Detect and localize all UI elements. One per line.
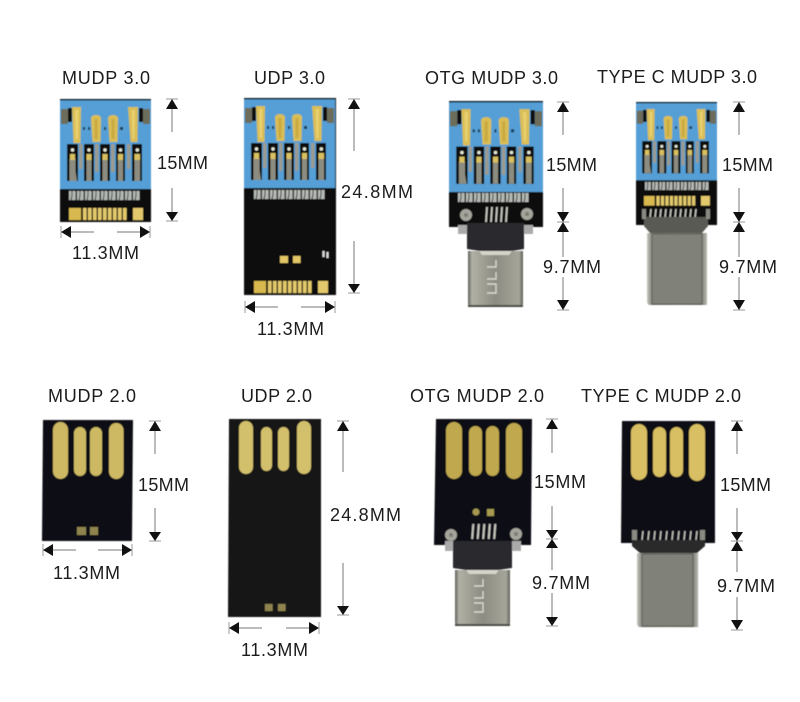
label: 9.7MM: 9.7MM xyxy=(543,257,601,277)
label: 11.3MM: 11.3MM xyxy=(72,243,139,263)
board: TYPE C MUDP 3.0 xyxy=(636,102,717,305)
title: TYPE C MUDP 3.0: TYPE C MUDP 3.0 xyxy=(597,67,757,87)
label: 15MM: 15MM xyxy=(534,472,586,492)
board: OTG MUDP 3.0 xyxy=(449,101,543,307)
label: 11.3MM: 11.3MM xyxy=(53,563,120,583)
title: OTG MUDP 3.0: OTG MUDP 3.0 xyxy=(425,68,558,88)
label: 11.3MM: 11.3MM xyxy=(241,640,308,660)
label: 11.3MM: 11.3MM xyxy=(257,319,324,339)
dimension: OTG MUDP 2.0 heights xyxy=(532,419,590,626)
label: 9.7MM: 9.7MM xyxy=(719,257,777,277)
title: UDP 2.0: UDP 2.0 xyxy=(241,386,312,406)
dimension: MUDP 3.0 height xyxy=(157,99,208,221)
title: OTG MUDP 2.0: OTG MUDP 2.0 xyxy=(410,386,544,406)
dimension: UDP 2.0 height xyxy=(330,421,401,615)
label: 9.7MM: 9.7MM xyxy=(532,573,590,593)
title: UDP 3.0: UDP 3.0 xyxy=(254,68,325,88)
board: UDP 3.0 xyxy=(244,98,336,295)
label: 15MM: 15MM xyxy=(720,475,771,495)
board: TYPE C MUDP 2.0 xyxy=(621,421,715,627)
dimension: MUDP 3.0 width xyxy=(61,226,150,263)
dimension: MUDP 2.0 width xyxy=(43,544,132,583)
title: MUDP 2.0: MUDP 2.0 xyxy=(48,386,136,406)
title: TYPE C MUDP 2.0: TYPE C MUDP 2.0 xyxy=(581,386,741,406)
label: 24.8MM: 24.8MM xyxy=(330,505,401,525)
label: 15MM: 15MM xyxy=(722,155,773,175)
board: MUDP 2.0 xyxy=(42,420,133,541)
dimension: TYPE C MUDP 2.0 heights xyxy=(717,421,775,630)
label: 15MM: 15MM xyxy=(546,155,597,175)
label: 15MM: 15MM xyxy=(157,153,208,173)
dimension: UDP 3.0 width xyxy=(245,301,335,339)
title: MUDP 3.0: MUDP 3.0 xyxy=(62,68,150,88)
dimension: TYPE C MUDP 3.0 heights xyxy=(719,102,777,310)
dimension: UDP 3.0 height xyxy=(341,99,413,293)
label: 9.7MM: 9.7MM xyxy=(717,576,775,596)
label: 15MM: 15MM xyxy=(138,475,189,495)
dimension: OTG MUDP 3.0 heights xyxy=(543,102,601,310)
board: OTG MUDP 2.0 xyxy=(434,419,532,626)
label: 24.8MM: 24.8MM xyxy=(341,182,413,202)
board: MUDP 3.0 xyxy=(60,99,151,222)
board: UDP 2.0 xyxy=(228,419,321,617)
dimension: MUDP 2.0 height xyxy=(138,421,189,541)
dimension: UDP 2.0 width xyxy=(229,622,319,660)
